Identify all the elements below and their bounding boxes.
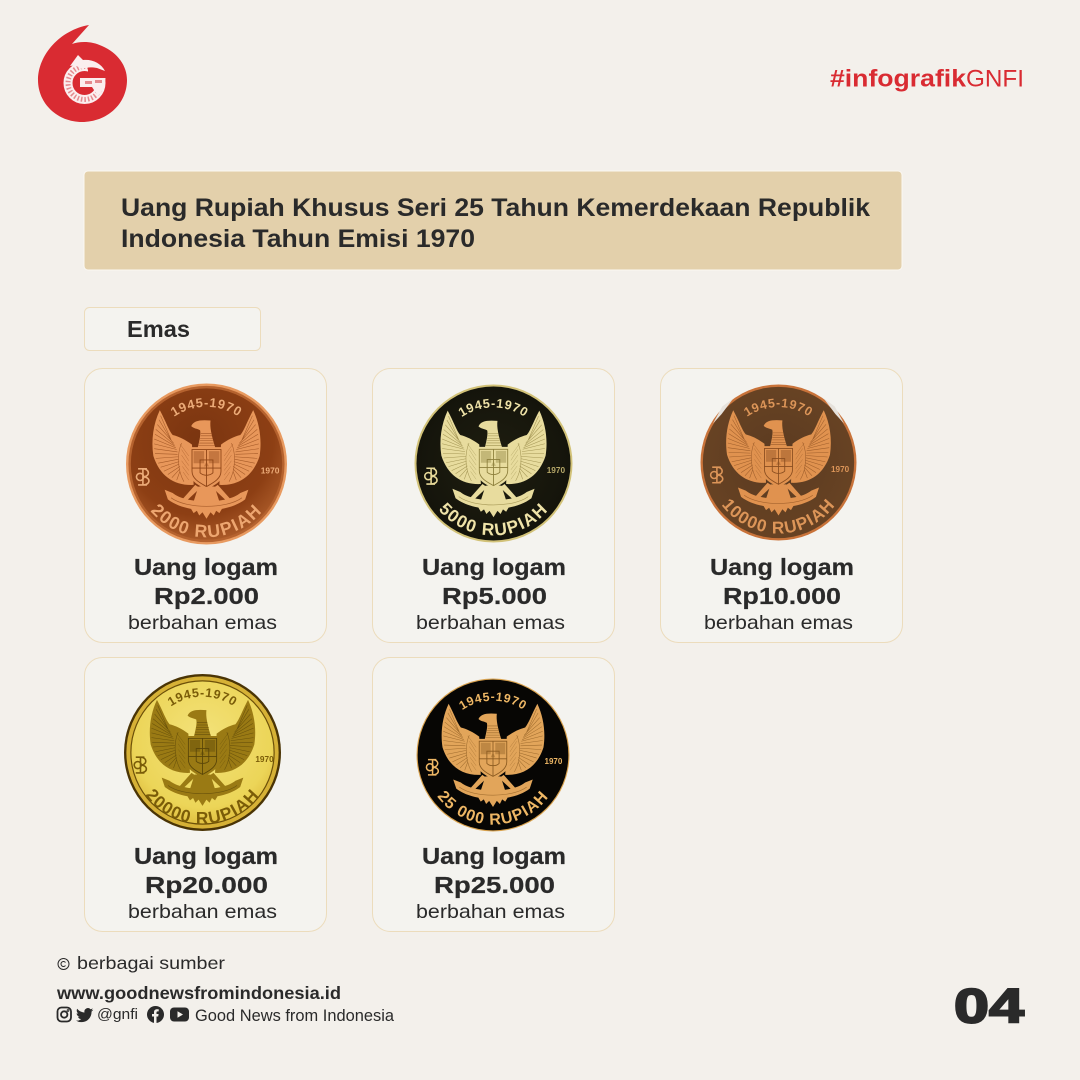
card text: Rp20.000 bbox=[145, 872, 268, 898]
card text bbox=[416, 843, 566, 923]
card text: Uang logam bbox=[134, 554, 278, 580]
card text: Uang logam bbox=[710, 554, 854, 580]
card text bbox=[128, 843, 278, 923]
page number: 04 bbox=[954, 980, 1024, 1034]
card text: Uang logam bbox=[134, 843, 278, 869]
card text: Rp25.000 bbox=[434, 872, 555, 898]
coin: 5000 rupiah: 1945-1970 bbox=[458, 398, 528, 417]
card text: berbahan emas bbox=[128, 612, 277, 634]
hashtag bbox=[830, 66, 1024, 92]
card text: Rp2.000 bbox=[154, 583, 259, 609]
card text: Uang logam bbox=[422, 554, 566, 580]
channel name: Good News from Indonesia bbox=[195, 1006, 395, 1025]
title text: Uang Rupiah Khusus Seri 25 Tahun Kemerdekaan Republik bbox=[121, 194, 870, 222]
card text: berbahan emas bbox=[128, 901, 277, 923]
coin: 25000 rupiah: 25 000 RUPIAH bbox=[437, 790, 548, 825]
card text: berbahan emas bbox=[416, 901, 565, 923]
website: www.goodnewsfromindonesia.id bbox=[56, 983, 341, 1003]
card text: Rp10.000 bbox=[723, 583, 841, 609]
card text: Uang logam bbox=[422, 843, 566, 869]
coin: 20000 rupiah: 1970 bbox=[255, 755, 274, 764]
category label: Emas: Emas bbox=[127, 316, 190, 342]
hashtag: GNFI bbox=[966, 66, 1024, 92]
hashtag: #infografik bbox=[830, 66, 967, 92]
coin: 10000 rupiah: 1970 bbox=[831, 465, 850, 474]
handle: @gnfi bbox=[97, 1006, 138, 1023]
card text bbox=[416, 554, 566, 634]
coin: 10000 rupiah bbox=[700, 384, 856, 540]
coin: 10000 rupiah: 10000 RUPIAH bbox=[722, 498, 834, 534]
card: Rp25.000 bbox=[372, 657, 615, 932]
coin: 20000 rupiah: 20000 RUPIAH bbox=[146, 789, 258, 824]
icon: youtube bbox=[170, 1008, 189, 1022]
card: Rp10.000 bbox=[660, 368, 903, 643]
card text bbox=[704, 554, 854, 634]
card text: Rp5.000 bbox=[442, 583, 547, 609]
coin: 5000 rupiah bbox=[414, 384, 572, 542]
coin: 2000 rupiah: 2000 RUPIAH bbox=[150, 504, 261, 538]
coin: 25000 rupiah: 1970 bbox=[545, 757, 563, 766]
coin: 2000 rupiah: 1970 bbox=[261, 466, 280, 476]
title text: Indonesia Tahun Emisi 1970 bbox=[121, 225, 475, 253]
coin: 20000 rupiah: 1945-1970 bbox=[168, 688, 236, 706]
logo: GNFI bbox=[38, 25, 127, 122]
coin: 5000 rupiah: 5000 RUPIAH bbox=[440, 502, 547, 536]
title panel bbox=[84, 171, 902, 270]
coin: 25000 rupiah bbox=[416, 678, 570, 832]
title text bbox=[121, 194, 870, 253]
coin: 5000 rupiah: 1970 bbox=[547, 465, 566, 475]
category label: Emas bbox=[84, 308, 260, 350]
card: Rp2.000 bbox=[84, 368, 327, 643]
icon: twitter bbox=[76, 1008, 93, 1022]
social row bbox=[58, 1006, 395, 1025]
card text: berbahan emas bbox=[704, 612, 853, 634]
source credit: berbagai sumber bbox=[77, 953, 225, 973]
icon: instagram bbox=[58, 1008, 71, 1022]
coin: 2000 rupiah bbox=[126, 384, 287, 544]
coin: 10000 rupiah: 1945-1970 bbox=[744, 398, 812, 416]
card: Rp5.000 bbox=[372, 368, 615, 643]
coin: 2000 rupiah: 1945-1970 bbox=[171, 398, 242, 416]
coin: 25000 rupiah: 1945-1970 bbox=[459, 692, 526, 710]
card: Rp20.000 bbox=[84, 657, 327, 932]
icon: facebook bbox=[147, 1006, 164, 1023]
coin: 20000 rupiah bbox=[124, 674, 281, 831]
card text: berbahan emas bbox=[416, 612, 565, 634]
card text bbox=[128, 554, 278, 634]
